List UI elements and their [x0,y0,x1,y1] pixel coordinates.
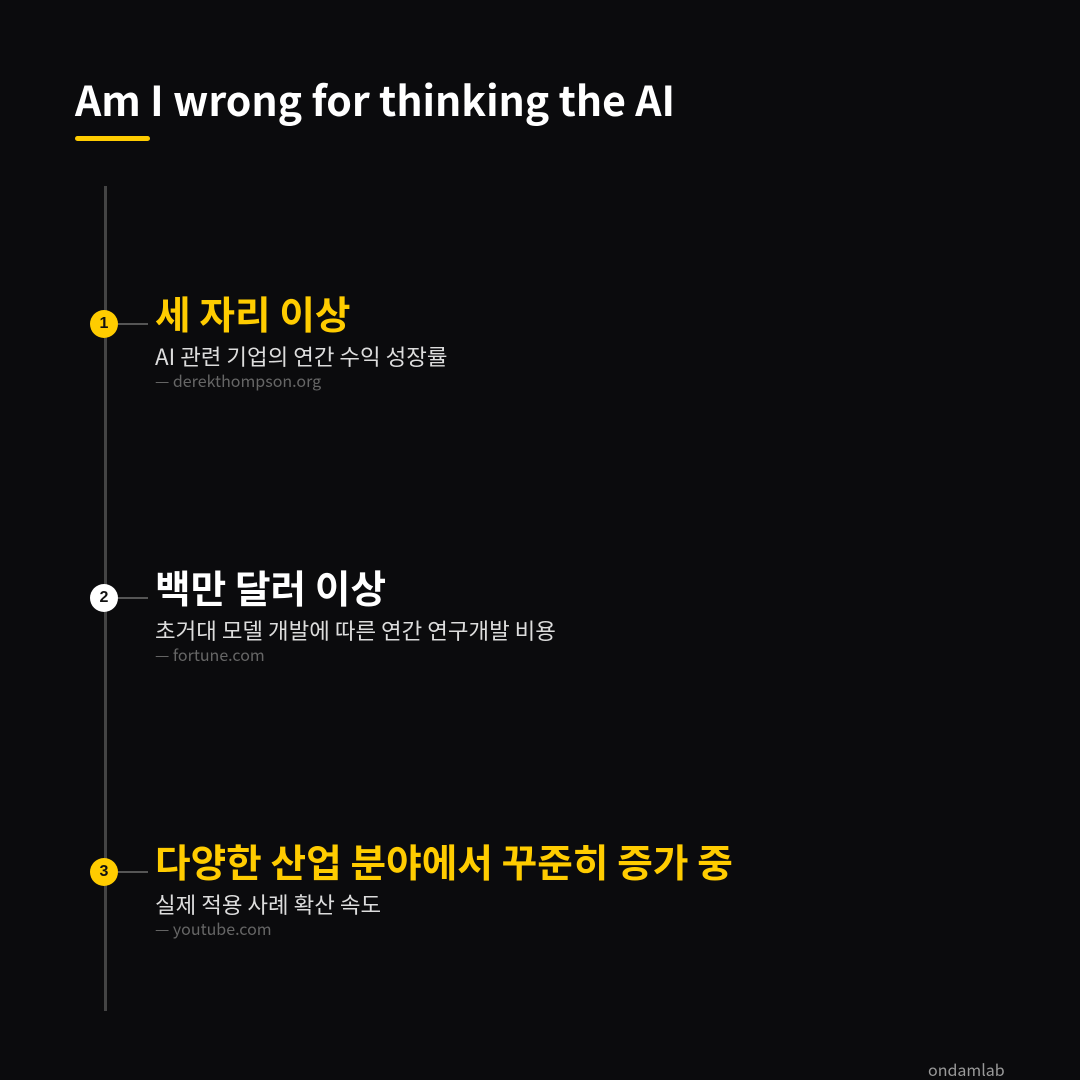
marker 2: 2 [100,589,108,606]
item 1 [90,285,447,392]
marker 1: 1 [100,315,108,332]
timeline line [104,186,107,1011]
connector 1 [118,323,148,325]
source 1: — derekthompson.org [155,368,321,392]
description 1: AI 관련 기업의 연간 수익 성장률 [155,340,447,372]
source 3: — youtube.com [155,916,272,940]
description 2: 초거대 모델 개발에 따른 연간 연구개발 비용 [155,614,556,646]
item 3 [90,833,733,940]
source 2: — fortune.com [155,642,265,666]
connector 3 [118,871,148,873]
description 3: 실제 적용 사례 확산 속도 [155,888,381,920]
marker 1 [90,310,118,338]
title: Am I wrong for thinking the AI [75,68,675,128]
marker 3: 3 [100,863,108,880]
heading 2: 백만 달러 이상 [155,559,386,615]
heading 1: 세 자리 이상 [155,285,351,341]
item 2 [90,559,556,666]
connector 2 [118,597,148,599]
title underline accent [75,136,150,141]
marker 2 [90,584,118,612]
heading 3: 다양한 산업 분야에서 꾸준히 증가 중 [155,833,733,889]
marker 3 [90,858,118,886]
